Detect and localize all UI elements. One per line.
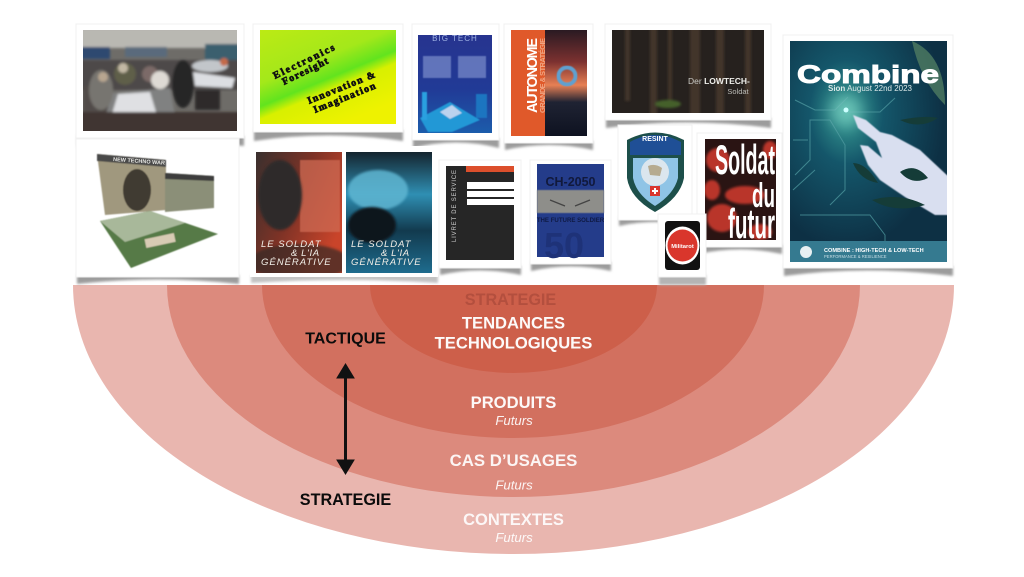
card: Soldat du futur: Soldat — [715, 136, 775, 183]
card: Combine magazine: Combine — [797, 61, 939, 89]
card: Electronics Foresight — [253, 24, 403, 141]
label: strategie: STRATEGIE — [300, 491, 391, 509]
label: contextes: Futurs — [495, 530, 533, 545]
card: workshop photo — [76, 24, 244, 146]
card: Soldat du futur: futur — [728, 200, 775, 247]
label: produits: PRODUITS — [471, 393, 556, 412]
card: Le Soldat et l'IA generative: GÉNÉRATIVE — [261, 257, 332, 268]
cover: red — [256, 152, 342, 273]
card: RESINT badge — [618, 125, 692, 226]
concentric half-ellipse diagram — [73, 285, 954, 554]
card: Le Soldat et l'IA generative — [250, 146, 438, 283]
icon: game box — [97, 154, 218, 268]
ring: tendances technologiques — [370, 285, 657, 373]
title text — [271, 42, 378, 116]
card: Autonome: GRANDE & STRATÉGIE — [538, 38, 547, 113]
card: Le Soldat et l'IA generative: LE SOLDAT — [351, 239, 412, 250]
arrow: double-headed tactique strategie — [337, 364, 354, 474]
card: Le Soldat et l'IA generative: & L'IA — [381, 248, 410, 259]
title text: Imagination — [312, 81, 378, 116]
card: New Techno War board game: NEW TECHNO WAR — [113, 157, 165, 167]
card: Big Tech: BIG TECH — [432, 34, 478, 43]
card: New Techno War board game — [76, 139, 239, 284]
label: tactique: TACTIQUE — [305, 330, 386, 348]
label: tendances technologiques: TENDANCES — [462, 314, 565, 332]
card: CH-2050: 50 — [544, 225, 584, 266]
card: Der Lowtech-Soldat: Soldat — [727, 87, 750, 96]
icon: shield — [627, 132, 684, 212]
card: Militarot: Militarot — [671, 244, 694, 250]
card: Combine magazine — [783, 35, 953, 276]
card: Combine magazine: Sion August 22nd 2023 — [828, 84, 913, 93]
label: produits — [471, 393, 556, 428]
card: Le Soldat et l'IA generative: LE SOLDAT — [261, 239, 322, 250]
card: Der Lowtech-Soldat: Der LOWTECH- — [688, 76, 750, 86]
card: Autonome — [504, 24, 593, 150]
title text: Foresight — [280, 56, 331, 88]
label: contextes: CONTEXTES — [463, 511, 564, 529]
card: CH-2050 — [530, 160, 611, 271]
ring: contextes — [73, 285, 954, 554]
card: Militarot — [658, 214, 706, 285]
label: tendances technologiques: TECHNOLOGIQUES — [435, 334, 592, 352]
card: CH-2050: THE FUTURE SOLDIER — [537, 217, 605, 224]
cover: blue — [346, 152, 432, 273]
ring: cas d'usages — [167, 285, 860, 497]
card: Soldat du futur: du — [752, 177, 775, 215]
card: Soldat du futur — [697, 133, 782, 254]
card: Big Tech — [412, 24, 499, 148]
ring: produits — [262, 285, 764, 438]
label: tendances technologiques — [435, 314, 592, 352]
card: Autonome: AUTONOME — [525, 38, 541, 113]
card: Der Lowtech-Soldat — [605, 24, 771, 128]
card: Le Soldat et l'IA generative: GÉNÉRATIVE — [351, 257, 422, 268]
circuit traces — [793, 97, 895, 250]
card: Livret de service — [439, 160, 521, 275]
label: cas d'usages — [450, 451, 577, 492]
card: Combine magazine: PERFORMANCE & RESILIENCE — [824, 254, 887, 259]
card: Combine magazine: COMBINE : HIGH-TECH & LOW-TECH — [824, 248, 924, 254]
card: Le Soldat et l'IA generative: & L'IA — [291, 248, 320, 259]
title text: Innovation & — [306, 70, 377, 107]
label: cas d'usages: Futurs — [495, 478, 533, 492]
card: CH-2050: CH-2050 — [545, 175, 596, 189]
label: produits: Futurs — [495, 413, 533, 428]
title text: Electronics — [271, 42, 337, 82]
label: STRATEGIE (muted): STRATEGIE — [465, 291, 556, 309]
card: RESINT badge: RESINT — [642, 136, 669, 143]
label: cas d'usages: CAS D’USAGES — [450, 451, 577, 470]
label: contextes — [463, 511, 564, 545]
icon: robotic hand — [853, 115, 950, 215]
card: Livret de service: LIVRET DE SERVICE — [452, 170, 458, 242]
